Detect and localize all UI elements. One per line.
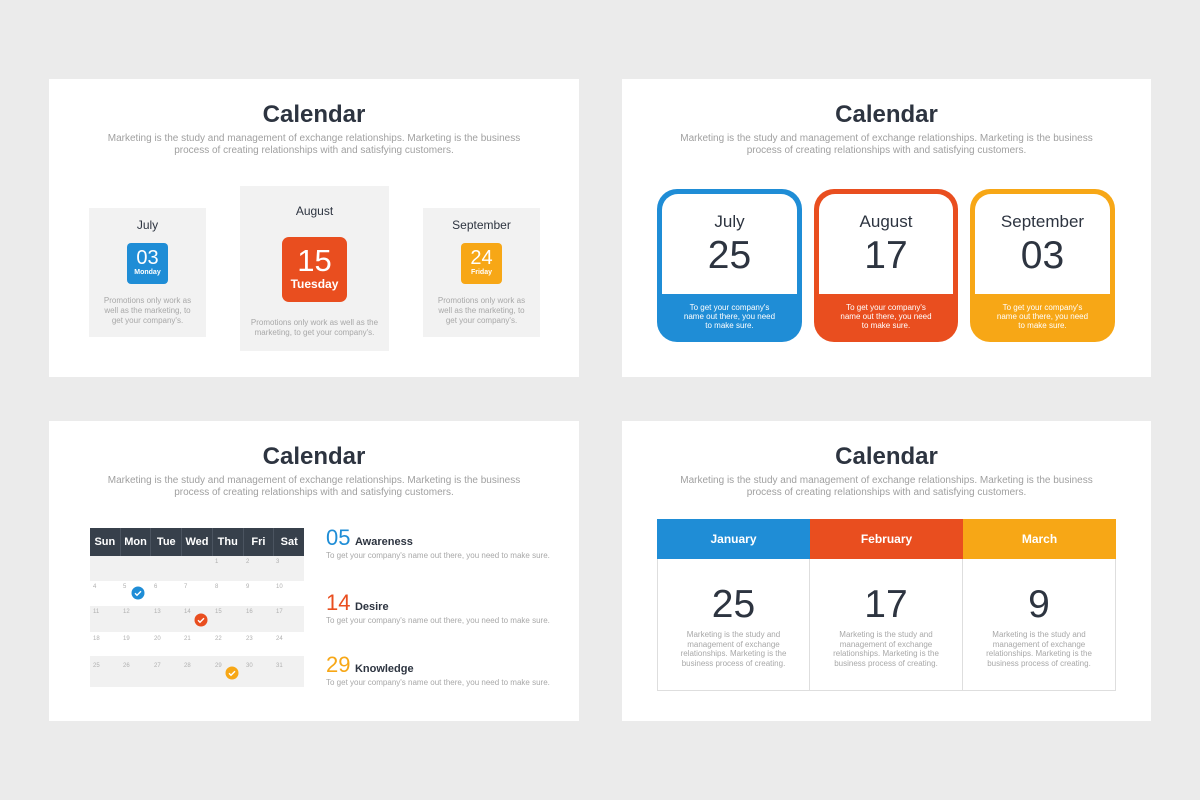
column: March: business process of creating. bbox=[987, 658, 1091, 668]
card: August 17 bbox=[814, 189, 958, 342]
panel: bottom-right calendar bbox=[622, 421, 1151, 721]
day numbers: 12 bbox=[123, 609, 130, 615]
day numbers: 2 bbox=[246, 559, 250, 565]
day numbers: 25 bbox=[93, 663, 100, 669]
card: September 03 bbox=[970, 189, 1115, 342]
item: Desire bbox=[326, 590, 550, 625]
icon: date 24: 24 bbox=[470, 247, 493, 269]
card: September 03: September bbox=[1001, 212, 1084, 231]
panel: top-left calendar bbox=[49, 79, 579, 377]
panel: top-right calendar bbox=[622, 79, 1151, 377]
title: Calendar bbox=[835, 443, 938, 470]
day numbers: 20 bbox=[154, 636, 161, 642]
weekday header bbox=[90, 528, 304, 556]
card: August: August bbox=[296, 204, 333, 218]
day numbers: 18 bbox=[93, 636, 100, 642]
day numbers: 1 bbox=[215, 559, 219, 565]
day numbers: 3 bbox=[276, 559, 280, 565]
day numbers: 8 bbox=[215, 584, 219, 590]
column: January: relationships. Marketing is the bbox=[681, 649, 786, 658]
column: February: business process of creating. bbox=[834, 658, 938, 668]
subtitle bbox=[680, 133, 1093, 156]
card: August 17: name out there, you need bbox=[840, 312, 932, 321]
weekday header: Wed bbox=[186, 536, 209, 548]
weekday header: Sun bbox=[94, 536, 115, 548]
subtitle bbox=[108, 133, 520, 156]
icon: date 15 bbox=[282, 237, 347, 302]
card: September 03: To get your company's bbox=[1003, 303, 1082, 312]
day numbers: 4 bbox=[93, 584, 97, 590]
column: February: 17 bbox=[864, 583, 908, 626]
day numbers: 21 bbox=[184, 636, 191, 642]
table: three months bbox=[657, 519, 1116, 691]
icon: check blue bbox=[132, 586, 144, 600]
subtitle: process of creating relationships with and satisfying customers. bbox=[174, 487, 454, 498]
weekday header: Mon bbox=[124, 536, 147, 548]
card: September 03: name out there, you need bbox=[997, 312, 1088, 321]
item: Desire: To get your company's name out there, you need to make sure. bbox=[326, 616, 550, 625]
item: Awareness: 05 Awareness bbox=[326, 525, 413, 550]
card: July 25: To get your company's bbox=[690, 303, 769, 312]
column: March: 9 bbox=[1028, 583, 1050, 626]
column: February bbox=[810, 519, 963, 691]
card: July 25: to make sure. bbox=[705, 321, 754, 330]
column: March: management of exchange bbox=[993, 640, 1085, 648]
day numbers: 16 bbox=[246, 609, 253, 615]
day numbers: 7 bbox=[184, 584, 188, 590]
day numbers: 17 bbox=[276, 609, 283, 615]
card: August bbox=[240, 186, 389, 351]
column: March: Marketing is the study and bbox=[992, 630, 1086, 639]
card: July 25: July bbox=[714, 212, 745, 231]
day numbers bbox=[93, 558, 283, 669]
column: February: relationships. Marketing is the bbox=[833, 649, 939, 658]
subtitle: Marketing is the study and management of exchange relationships. Marketing is the business bbox=[108, 133, 520, 144]
icon: date 03: Monday bbox=[134, 269, 161, 276]
card: September 03: to make sure. bbox=[1018, 321, 1067, 330]
day numbers: 13 bbox=[154, 609, 161, 615]
subtitle: Marketing is the study and management of exchange relationships. Marketing is the business bbox=[108, 475, 520, 486]
card: August 17: August bbox=[860, 212, 912, 231]
day numbers: 15 bbox=[215, 609, 222, 615]
column: January: business process of creating. bbox=[682, 658, 785, 668]
card: July bbox=[89, 208, 206, 337]
day numbers: 19 bbox=[123, 636, 130, 642]
subtitle: Marketing is the study and management of exchange relationships. Marketing is the business bbox=[680, 475, 1093, 486]
icon: date 24 bbox=[461, 243, 502, 284]
day numbers: 28 bbox=[184, 663, 191, 669]
icon: date 15: 15 bbox=[297, 243, 332, 278]
card: September bbox=[423, 208, 540, 337]
weekday header: Tue bbox=[157, 536, 176, 548]
weekday header: Thu bbox=[218, 536, 238, 548]
card: July 25: 25 bbox=[708, 234, 751, 277]
day numbers: 14 bbox=[184, 609, 191, 615]
card: September 03: 03 bbox=[1021, 234, 1064, 277]
day numbers: 26 bbox=[123, 663, 130, 669]
column: February: Marketing is the study and bbox=[839, 630, 933, 639]
item: Awareness bbox=[326, 525, 550, 560]
day numbers: 6 bbox=[154, 584, 158, 590]
card: August 17: 17 bbox=[864, 234, 908, 277]
card: July: well as the marketing, to bbox=[104, 306, 191, 315]
card: August: marketing, to get your company's. bbox=[255, 328, 374, 337]
day numbers: 27 bbox=[154, 663, 161, 669]
card: July: get your company's. bbox=[112, 316, 183, 325]
column: January: Marketing is the study and bbox=[687, 630, 780, 639]
day numbers: 9 bbox=[246, 584, 250, 590]
card: August: Promotions only work as well as the bbox=[251, 318, 378, 327]
column: January: 25 bbox=[712, 583, 755, 626]
title: Calendar bbox=[263, 101, 365, 128]
subtitle: process of creating relationships with and satisfying customers. bbox=[174, 145, 454, 156]
card: September: get your company's. bbox=[446, 316, 517, 325]
icon: check red bbox=[194, 614, 208, 626]
icon: date 15: Tuesday bbox=[291, 277, 338, 291]
card: July 25: name out there, you need bbox=[684, 312, 775, 321]
item: Desire: 14 Desire bbox=[326, 590, 389, 615]
card: August 17: to make sure. bbox=[862, 321, 910, 330]
column: January bbox=[657, 519, 810, 691]
column: March bbox=[963, 519, 1116, 691]
day numbers: 10 bbox=[276, 584, 283, 590]
subtitle: process of creating relationships with and satisfying customers. bbox=[747, 487, 1026, 498]
day numbers: 31 bbox=[276, 663, 283, 669]
item: Knowledge: To get your company's name out there, you need to make sure. bbox=[326, 678, 550, 687]
icon: date 03 bbox=[127, 243, 168, 284]
card: August 17: To get your company's bbox=[846, 303, 926, 312]
title: Calendar bbox=[263, 443, 365, 470]
day numbers: 23 bbox=[246, 636, 253, 642]
subtitle: Marketing is the study and management of exchange relationships. Marketing is the business bbox=[680, 133, 1093, 144]
weekday header: Fri bbox=[251, 536, 265, 548]
column: February: management of exchange bbox=[840, 640, 932, 648]
card: July: Promotions only work as bbox=[104, 296, 191, 305]
card: September: Promotions only work as bbox=[438, 296, 525, 305]
icon: date 24: Friday bbox=[471, 269, 492, 276]
card: July: July bbox=[137, 218, 158, 232]
day numbers: 30 bbox=[246, 663, 253, 669]
column: March: relationships. Marketing is the bbox=[986, 649, 1092, 658]
item: Awareness: To get your company's name out there, you need to make sure. bbox=[326, 551, 550, 560]
day numbers: 22 bbox=[215, 636, 222, 642]
column: March: March bbox=[1022, 532, 1057, 546]
column: February: February bbox=[861, 532, 912, 546]
day numbers: 24 bbox=[276, 636, 283, 642]
item: Knowledge: 29 Knowledge bbox=[326, 652, 414, 677]
month grid bbox=[90, 528, 304, 687]
column: January: January bbox=[710, 532, 757, 546]
day numbers: 29 bbox=[215, 663, 222, 669]
item: Knowledge bbox=[326, 652, 550, 687]
title: Calendar bbox=[835, 101, 938, 128]
column: January: management of exchange bbox=[687, 640, 780, 648]
icon: date 03: 03 bbox=[136, 247, 159, 269]
card: September: September bbox=[452, 218, 511, 232]
card: July 25 bbox=[657, 189, 802, 342]
day numbers: 11 bbox=[93, 609, 100, 615]
weekday header: Sat bbox=[281, 536, 298, 548]
card: September: well as the marketing, to bbox=[438, 306, 525, 315]
subtitle bbox=[108, 475, 520, 498]
subtitle bbox=[680, 475, 1093, 498]
icon: check amber bbox=[226, 666, 238, 680]
subtitle: process of creating relationships with and satisfying customers. bbox=[747, 145, 1026, 156]
panel: bottom-left calendar bbox=[49, 421, 579, 721]
day numbers: 5 bbox=[123, 584, 127, 590]
